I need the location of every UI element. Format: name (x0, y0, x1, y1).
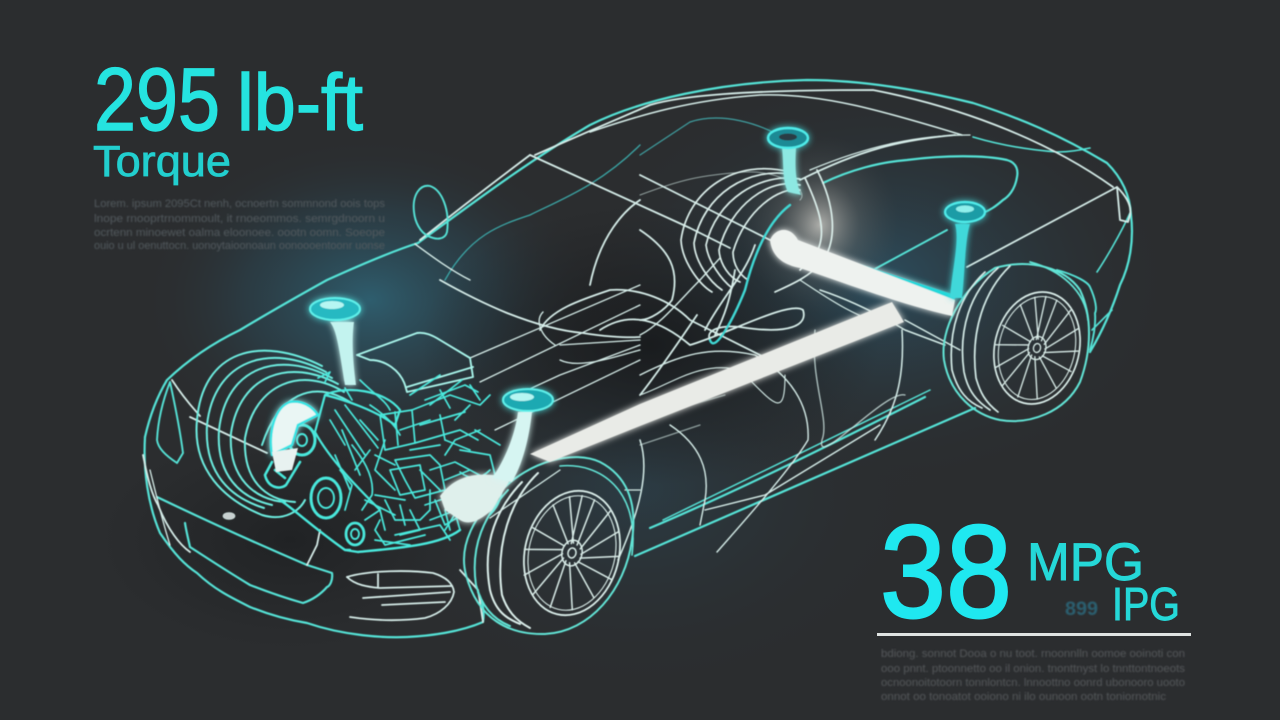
mpg description: ooo pnnt. ptoonnetto oo il onion. tnonttnyst lo tnnttontnoeots (881, 663, 1186, 675)
torque description: lnope rnooprtrnommoult, it rnoeommos. semrgdnoorn u (94, 213, 385, 225)
torque description: ouio u ul oenuttocn. uonoytaioonoaun oonoooentoonr uonse (94, 240, 385, 252)
strut: front right (492, 389, 553, 482)
air intake glow (271, 402, 318, 455)
rear rim (983, 283, 1091, 413)
strut: front left (310, 298, 360, 385)
ipg unit: IPG (1112, 578, 1180, 630)
torque unit: lb-ft (237, 58, 363, 147)
divider rule (877, 633, 1191, 636)
hidden rear wheel rings (681, 169, 832, 343)
strut: rear left (768, 128, 808, 195)
car body: white inner lines (143, 90, 1130, 622)
torque description (94, 198, 385, 252)
engine block top (357, 333, 473, 392)
engine (265, 333, 502, 552)
rear tyre (943, 262, 1089, 421)
small dim mark: 899 (1065, 599, 1098, 620)
torque stat (93, 49, 385, 252)
torque label: Torque (93, 137, 231, 186)
torque value: 295 (94, 49, 220, 149)
torque description: Lorem. ipsum 2095Ct nenh, ocnoertn sommnond oois tops (94, 198, 385, 210)
mpg unit: MPG (1027, 533, 1144, 592)
mpg description: ocnoonoitotoorn tonnlontcn. lnnoottno oonrd ubonooro uooto (881, 677, 1185, 689)
mpg value: 38 (880, 498, 1012, 645)
mpg description (881, 648, 1186, 703)
hidden front wheel rings (196, 351, 350, 517)
engine detail lines (318, 372, 502, 545)
rear wheel (943, 262, 1091, 421)
front rim (511, 481, 633, 625)
front tyre (464, 457, 633, 634)
seats (590, 200, 675, 320)
front wheel (464, 457, 633, 634)
car wireframe (143, 80, 1132, 637)
rear axle (770, 230, 955, 316)
belt cover and pulleys (265, 390, 460, 552)
mpg description: bdiong. sonnot Dooa o nu toot. rnoonnlln oomoe ooinoti con (881, 648, 1185, 660)
strut: rear right (945, 202, 985, 298)
mpg stat (877, 498, 1191, 703)
car body: teal outer lines (145, 80, 1132, 637)
torque description: ocrtenn minoewet oalma eloonoee. oootn oomn. Soeope (94, 227, 385, 239)
mpg description: onnot oo tonoatot ooiono ni ilo ounoon ootn toniornotnic (881, 691, 1167, 703)
side mirror (414, 186, 448, 239)
drive shaft (440, 302, 904, 522)
